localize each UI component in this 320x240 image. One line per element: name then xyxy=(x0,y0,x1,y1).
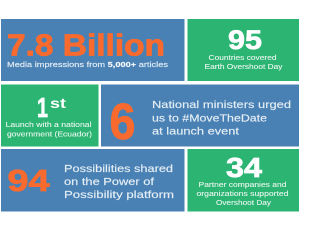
panel: media impressions xyxy=(1,19,184,81)
panel: first launch xyxy=(1,84,98,146)
big number: 6: 6 xyxy=(110,93,136,150)
text: possibilities description: Possibilities shared xyxy=(64,163,173,175)
superscript: st: st xyxy=(50,95,66,111)
big number: 95: 95 xyxy=(228,25,262,55)
big number: 34: 34 xyxy=(226,152,262,183)
text: partner caption: organizations supported xyxy=(197,191,289,198)
text: partner caption: Overshoot Day xyxy=(216,200,272,207)
text: countries caption: Earth Overshoot Day xyxy=(204,64,283,71)
text: possibilities description: on the Power of xyxy=(64,176,154,188)
text: ministers description: at launch event xyxy=(152,126,239,138)
panel: partner companies xyxy=(188,149,299,212)
big number: 1st: 1 xyxy=(37,92,48,123)
text: countries caption: Countries covered xyxy=(209,55,277,62)
panel: national ministers xyxy=(101,84,299,150)
text: ministers description: National ministers urged xyxy=(152,99,291,111)
text: launch caption: Launch with a national xyxy=(6,122,92,129)
panel: possibilities shared xyxy=(1,149,184,212)
text: ministers description: us to #MoveTheDate xyxy=(152,112,267,124)
big number: 94: 94 xyxy=(8,163,50,198)
text: possibilities description: Possibility platform xyxy=(64,189,174,201)
text: partner caption: Partner companies and xyxy=(199,182,287,189)
big number: 7.8 Billion: 7.8 Billion xyxy=(7,28,165,62)
panel: countries covered xyxy=(188,19,299,81)
text: media impressions caption: Media impressions from 5,000+ articles xyxy=(7,60,168,69)
text: launch caption: government (Ecuador) xyxy=(7,132,92,138)
